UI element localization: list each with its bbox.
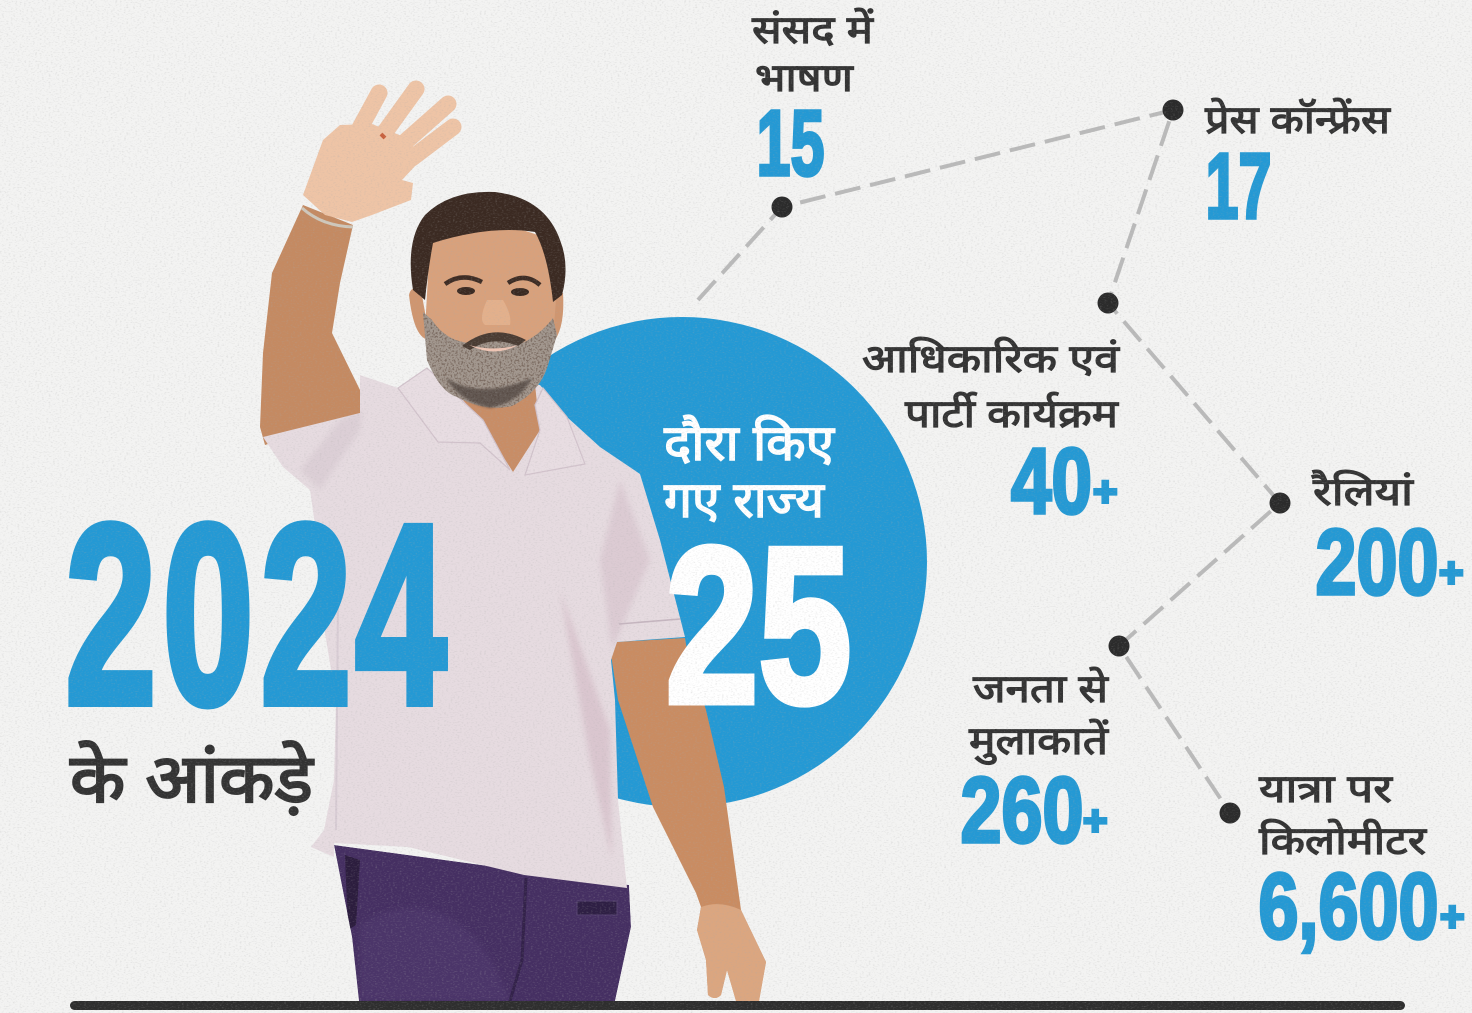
states visited number: 25 bbox=[666, 502, 852, 750]
stat: official and party events: 40 bbox=[1011, 429, 1092, 533]
stat: parliament speeches: 15 bbox=[756, 91, 824, 195]
person waving bbox=[260, 89, 766, 1001]
bottom bar bbox=[70, 1001, 1405, 1010]
raised arm bbox=[260, 205, 360, 445]
states visited label: दौरा किए bbox=[663, 414, 836, 471]
stat: press conferences: 17 bbox=[1206, 134, 1272, 238]
lowered arm bbox=[611, 638, 766, 1001]
stat: kilometres travelled: + bbox=[1440, 893, 1465, 940]
stat: kilometres travelled bbox=[1258, 768, 1465, 958]
timeline dots bbox=[772, 100, 1290, 824]
stat: public meetings bbox=[960, 666, 1110, 862]
stat: kilometres travelled: किलोमीटर bbox=[1258, 818, 1428, 863]
stat: parliament speeches bbox=[751, 7, 875, 195]
stat: rallies: 200 bbox=[1316, 510, 1438, 614]
shirt collar bbox=[398, 368, 585, 475]
blue circle bbox=[437, 317, 927, 807]
raised hand bbox=[302, 89, 453, 227]
stat: official and party events bbox=[862, 336, 1121, 533]
stat: official and party events: + bbox=[1093, 468, 1118, 515]
stat: parliament speeches: भाषण bbox=[755, 57, 855, 100]
stat: parliament speeches: संसद में bbox=[751, 7, 875, 52]
stat: official and party events: आधिकारिक एवं bbox=[862, 336, 1121, 381]
polo shirt bbox=[263, 372, 685, 888]
stat: rallies bbox=[1310, 469, 1464, 614]
stat: kilometres travelled: यात्रा पर bbox=[1258, 768, 1394, 811]
dashed connector path bbox=[698, 110, 1280, 813]
stat: public meetings: + bbox=[1083, 797, 1108, 844]
neck bbox=[455, 385, 540, 472]
stat: press conferences bbox=[1204, 97, 1392, 238]
stat: press conferences: प्रेस कॉन्फ्रेंस bbox=[1204, 97, 1392, 142]
stat: public meetings: 260 bbox=[960, 758, 1084, 862]
stat: official and party events: पार्टी कार्यक्रम bbox=[904, 391, 1120, 436]
subtitle: के आंकड़े bbox=[68, 740, 316, 817]
year 2024: 2024 bbox=[65, 471, 446, 758]
head bbox=[409, 192, 566, 408]
states visited label bbox=[663, 414, 836, 528]
states visited label: गए राज्य bbox=[663, 472, 826, 528]
stat: public meetings: जनता से bbox=[972, 666, 1110, 711]
stat: rallies: + bbox=[1439, 549, 1464, 596]
stat: public meetings: मुलाकातें bbox=[968, 718, 1110, 766]
stat: rallies: रैलियां bbox=[1310, 469, 1415, 514]
trousers bbox=[334, 845, 631, 1001]
